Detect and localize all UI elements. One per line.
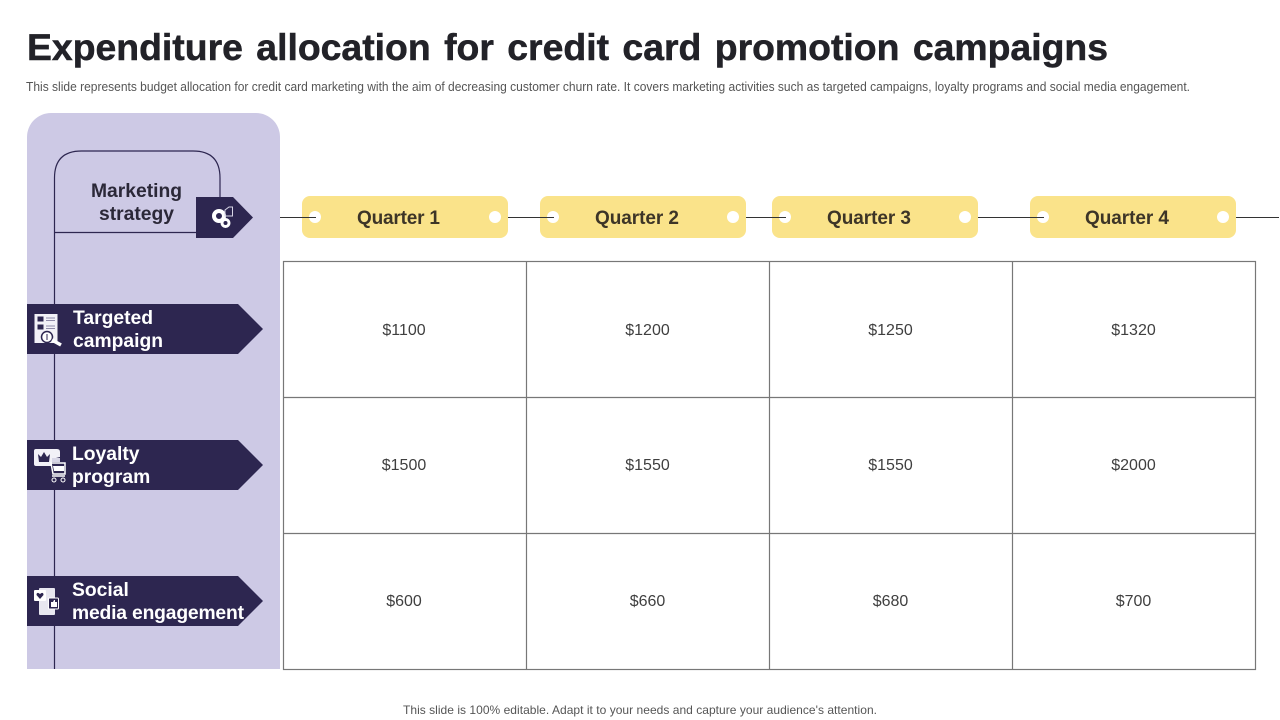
quarter 3 pill: Quarter 3 xyxy=(827,208,911,229)
heading: marketing strategy: strategy xyxy=(99,204,174,225)
quarter 1 pill: Quarter 1 xyxy=(357,208,440,229)
row: social media engagement values: $600 xyxy=(386,593,422,610)
connector line: quarters xyxy=(280,216,1279,218)
loyalty program label xyxy=(27,440,263,490)
targeted campaign label: campaign xyxy=(73,331,163,352)
row: targeted campaign values: $1250 xyxy=(868,322,913,339)
quarter 4 pill xyxy=(1030,196,1236,238)
quarter 2 pill xyxy=(540,196,746,238)
quarter 4 pill: Quarter 4 xyxy=(1085,208,1169,229)
icon: social media phone xyxy=(34,588,58,615)
loyalty program label: Loyalty xyxy=(72,444,140,465)
title: Expenditure allocation for credit card promotion campaigns xyxy=(27,27,1108,68)
row: loyalty program values: $1550 xyxy=(625,457,670,474)
heading: marketing strategy: Marketing xyxy=(91,181,182,202)
row: social media engagement values: $660 xyxy=(630,593,665,610)
quarter 3 pill xyxy=(772,196,978,238)
loyalty program label: program xyxy=(72,467,150,488)
icon: checklist with dollar magnifier xyxy=(34,314,61,345)
targeted campaign label xyxy=(27,304,263,354)
row: loyalty program values: $1550 xyxy=(868,457,913,474)
quarter 2 pill: Quarter 2 xyxy=(595,208,679,229)
row: social media engagement values xyxy=(386,593,1151,610)
social media engagement label: media engagement xyxy=(72,603,245,624)
footer note: This slide is 100% editable. Adapt it to your needs and capture your audience's attention. xyxy=(403,703,877,717)
budget table xyxy=(283,261,1256,670)
quarter 1 pill xyxy=(302,196,508,238)
social media engagement label: Social xyxy=(72,580,129,601)
row: loyalty program values xyxy=(382,457,1156,474)
panel: marketing strategy column xyxy=(27,113,280,669)
social media engagement label xyxy=(27,576,263,626)
row: targeted campaign values xyxy=(382,322,1156,339)
row: targeted campaign values: $1320 xyxy=(1111,322,1156,339)
row: social media engagement values: $680 xyxy=(873,593,908,610)
targeted campaign label: Targeted xyxy=(73,308,153,329)
row: loyalty program values: $2000 xyxy=(1111,457,1156,474)
subtitle description: This slide represents budget allocation for credit card marketing with the aim of decreasing customer churn rate. It covers marketing activities such as targeted campaigns, loyalty programs and social media engagement. xyxy=(26,80,1190,94)
row: targeted campaign values: $1100 xyxy=(382,322,426,339)
row: loyalty program values: $1500 xyxy=(382,457,426,474)
icon: loyalty crown and cart xyxy=(34,449,65,482)
row: targeted campaign values: $1200 xyxy=(625,322,670,339)
row: social media engagement values: $700 xyxy=(1116,593,1151,610)
icon: marketing strategy arrow xyxy=(196,197,253,238)
